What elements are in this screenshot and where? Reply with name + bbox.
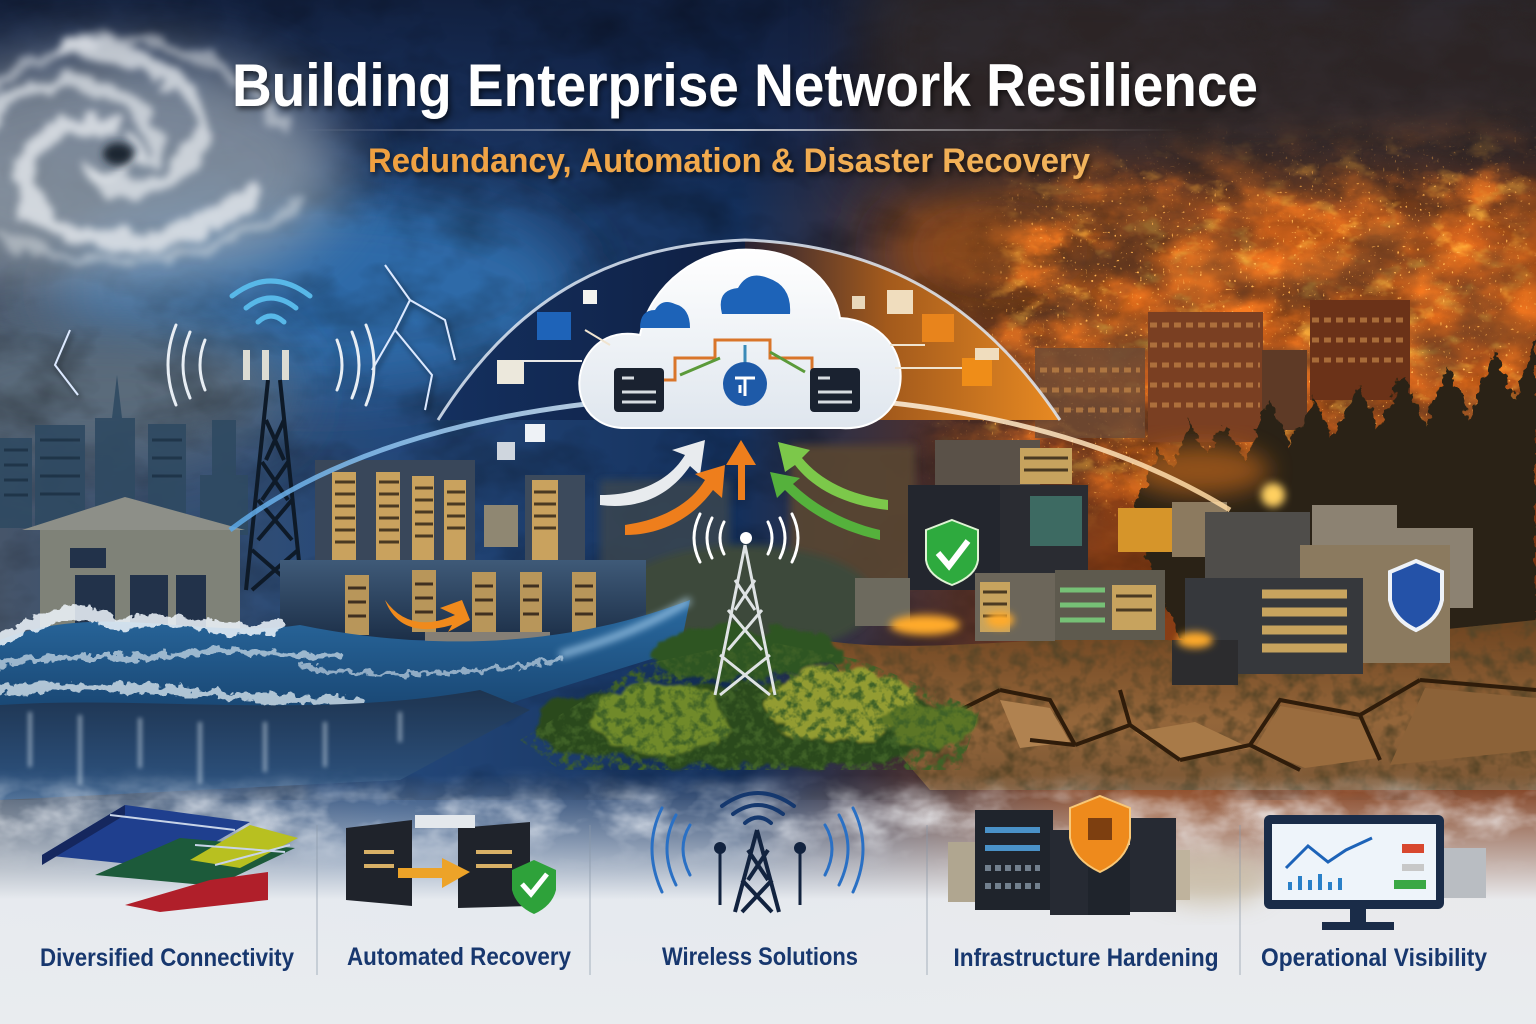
arrow: green upper: [778, 442, 888, 510]
panel: automated recovery: [346, 815, 571, 971]
flooded classical building: [22, 497, 245, 640]
label: Automated Recovery: [347, 943, 571, 971]
title divider: [300, 129, 1180, 131]
icon: central hub: [723, 362, 767, 406]
network links: [660, 340, 812, 380]
arrow: orange left: [625, 465, 725, 535]
embers: [890, 612, 1213, 648]
icon: wireless tower: [652, 793, 863, 912]
label: Diversified Connectivity: [40, 944, 294, 972]
label: Infrastructure Hardening: [954, 944, 1218, 972]
cell tower left: [168, 281, 374, 590]
icon: failover servers with shield: [346, 815, 556, 914]
panel: wireless solutions: [652, 793, 863, 971]
bottom panel background: [0, 773, 1536, 1024]
icon: large blue cloud: [721, 276, 790, 314]
floating network nodes: [497, 290, 999, 460]
dome: [438, 240, 1060, 420]
title: Building Enterprise Network Resilience: [232, 52, 1258, 119]
panel: infrastructure hardening: [948, 796, 1218, 972]
icon: left server: [614, 368, 664, 412]
arrow: green lower: [770, 472, 880, 540]
lightning: [55, 265, 455, 410]
flood water: [0, 600, 690, 800]
cracked earth: [830, 620, 1536, 790]
right burning skyline: [1035, 300, 1410, 442]
panel: operational visibility: [1261, 815, 1487, 972]
arrows to cloud: [600, 440, 888, 540]
burning forest: [1130, 335, 1536, 640]
connector arc: [230, 395, 1230, 530]
icon: small blue cloud: [640, 302, 690, 328]
arrow: white: [600, 440, 705, 506]
icon: right server: [810, 368, 860, 412]
label: Operational Visibility: [1261, 944, 1487, 972]
server cluster with blue shield: [1118, 502, 1473, 685]
data center left: [280, 460, 646, 664]
arrow: orange center: [726, 440, 756, 500]
panel dividers: [317, 825, 1240, 975]
icon: monitor dashboard: [1264, 815, 1486, 930]
central cell tower: [694, 514, 798, 695]
cloud: [579, 250, 901, 428]
left skyline: [0, 375, 248, 535]
server cluster with green shield: [855, 440, 1165, 641]
label: Wireless Solutions: [662, 943, 858, 971]
panel: diversified connectivity: [40, 805, 298, 972]
center background buildings haze: [600, 445, 915, 655]
icon: fiber and cable bundles: [42, 805, 298, 912]
subtitle: Redundancy, Automation & Disaster Recovery: [368, 142, 1090, 180]
icon: racks with orange shield: [948, 796, 1190, 915]
hurricane spiral: [0, 41, 343, 290]
green bushes: [520, 626, 990, 775]
